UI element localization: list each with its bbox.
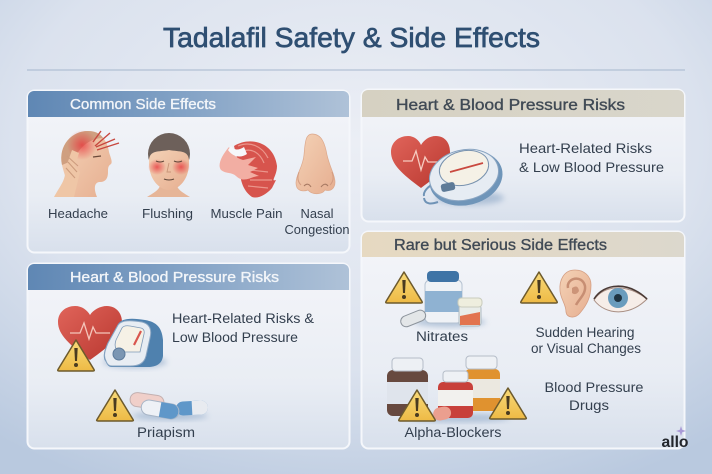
icon: heart and gauge: [391, 136, 508, 213]
icon: ear and eye with warning: [521, 270, 647, 317]
label: headache: Headache: [48, 206, 108, 221]
label: blood pressure drugs: Blood Pressure: [544, 380, 644, 395]
text: heart-related risks: [519, 140, 664, 175]
label: nasal congestion: Congestion: [284, 222, 350, 237]
label: nasal congestion: Nasal: [300, 206, 334, 221]
label: blood pressure drugs: [544, 380, 644, 413]
header: rare but serious side effects: [362, 232, 684, 257]
label: nitrates: Nitrates: [416, 329, 468, 344]
header: heart and blood pressure risks: Heart & Blood Pressure Risks: [396, 97, 625, 114]
icon: heart with gauge and warning: [58, 306, 167, 371]
logo: allo: [662, 426, 689, 451]
text: heart-related risks: Heart-Related Risks &: [172, 311, 314, 326]
icon: flushing: [147, 133, 190, 197]
panel: rare but serious side effects: [362, 232, 684, 448]
text: heart-related risks: & Low Blood Pressure: [519, 159, 664, 175]
label: sudden hearing or visual changes: [531, 325, 641, 356]
header: heart and blood pressure risks: [362, 90, 684, 117]
label: muscle pain: Muscle Pain: [210, 206, 282, 221]
label: blood pressure drugs: Drugs: [569, 398, 609, 413]
label: nasal congestion: [284, 206, 350, 237]
panel: common side effects: [28, 90, 350, 252]
header: common side effects: [28, 91, 349, 117]
label: sudden hearing or visual changes: or Visual Changes: [531, 341, 641, 356]
icon: nitrates: [386, 271, 486, 328]
text: heart-related risks: Low Blood Pressure: [172, 330, 298, 345]
header: heart and blood pressure risks: [28, 264, 349, 290]
panel: heart and blood pressure risks (left): [28, 264, 350, 448]
icon: alpha-blocker bottles with warnings: [387, 356, 526, 422]
text: heart-related risks: [172, 311, 314, 345]
title: Tadalafil Safety & Side Effects: [163, 22, 540, 53]
header: heart and blood pressure risks: Heart & Blood Pressure Risks: [70, 269, 279, 286]
icon: headache: [54, 130, 119, 197]
icon: priapism warning and pills: [97, 390, 208, 421]
label: alpha-blockers: Alpha-Blockers: [404, 425, 502, 440]
icon: muscle pain: [220, 141, 277, 198]
header: common side effects: Common Side Effects: [70, 96, 216, 113]
label: flushing: Flushing: [142, 206, 193, 221]
header: rare but serious side effects: Rare but Serious Side Effects: [394, 237, 607, 254]
icon: nasal congestion: [296, 134, 335, 194]
label: priapism: Priapism: [137, 425, 195, 440]
text: heart-related risks: Heart-Related Risks: [519, 140, 652, 156]
panel: heart and blood pressure risks (right): [362, 90, 684, 222]
label: sudden hearing or visual changes: Sudden Hearing: [536, 325, 634, 340]
logo: allo: allo: [662, 434, 689, 451]
